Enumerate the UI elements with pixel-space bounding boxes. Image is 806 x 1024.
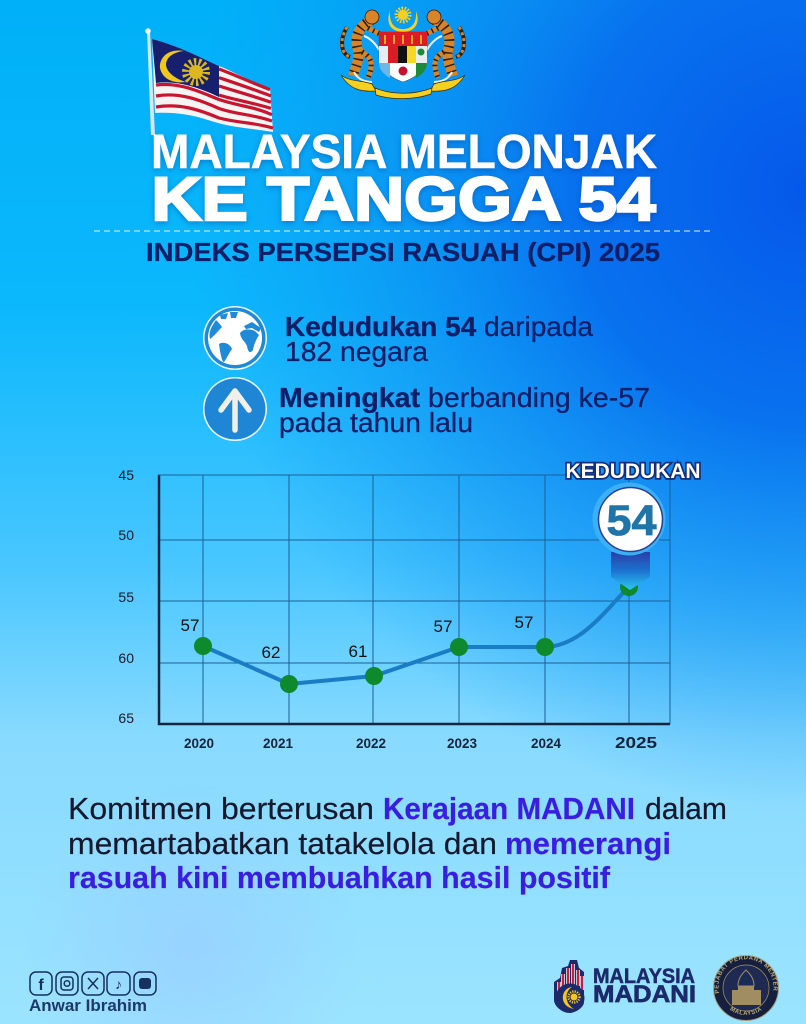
y axis labels — [118, 467, 134, 726]
closing statement: rasuah kini membuahkan hasil positif — [68, 860, 611, 895]
data labels: 62 — [262, 643, 280, 662]
title line 2: KE TANGGA 54 — [152, 165, 656, 233]
text: ranking: Kedudukan 54 daripada — [285, 311, 593, 342]
logo: Malaysia Madani — [554, 960, 696, 1013]
x axis labels — [184, 735, 657, 752]
chart grid — [158, 475, 670, 724]
x axis labels: 2025 — [615, 735, 657, 752]
icon: Malaysian flag — [145, 28, 273, 135]
closing statement: dalam — [645, 791, 727, 826]
social icons — [30, 972, 156, 995]
social icons: ♪ — [115, 976, 122, 992]
x axis labels: 2021 — [263, 736, 294, 751]
y axis labels: 55 — [118, 589, 134, 605]
logo: Pejabat Perdana Menteri seal: MALAYSIA — [730, 1006, 762, 1015]
data labels: 57 — [181, 616, 199, 635]
closing statement: Kerajaan MADANI — [383, 791, 635, 826]
data labels: 57 — [515, 613, 533, 632]
footer name: Anwar Ibrahim — [29, 996, 147, 1015]
closing statement: Komitmen berterusan — [68, 791, 374, 826]
left tiger — [342, 10, 380, 82]
social icons: f — [38, 977, 44, 994]
callout label: KEDUDUKAN — [566, 460, 700, 483]
text: improvement: pada tahun lalu — [279, 407, 473, 438]
data labels — [181, 613, 533, 662]
title line 1: MALAYSIA MELONJAK — [151, 126, 657, 179]
closing statement: memartabatkan tatakelola dan — [68, 826, 497, 861]
text: improvement — [279, 382, 650, 438]
icon: globe — [203, 306, 267, 370]
y axis labels: 50 — [118, 527, 134, 543]
callout: kedudukan 54 — [566, 460, 700, 590]
logo text: MALAYSIA — [593, 965, 695, 988]
y axis labels: 45 — [118, 467, 134, 483]
logo text — [593, 965, 696, 1008]
data line — [203, 587, 629, 684]
logo text: MADANI — [593, 981, 696, 1008]
line chart — [118, 467, 670, 752]
icon: up arrow — [203, 377, 267, 441]
y axis labels: 65 — [118, 710, 134, 726]
x axis labels: 2023 — [447, 736, 478, 751]
closing statement — [68, 791, 727, 895]
x axis labels: 2022 — [356, 736, 386, 751]
closing statement: memerangi — [505, 826, 671, 861]
data labels: 57 — [434, 617, 452, 636]
data points — [194, 578, 638, 693]
right tiger — [426, 10, 464, 82]
text: ranking — [285, 311, 593, 367]
title — [151, 126, 657, 233]
text: improvement: Meningkat berbanding ke-57 — [279, 382, 650, 413]
text: ranking: 182 negara — [285, 336, 428, 367]
data labels: 61 — [349, 642, 367, 661]
icon: national coat of arms — [341, 8, 465, 99]
logo mark — [554, 960, 584, 1013]
subtitle: INDEKS PERSEPSI RASUAH (CPI) 2025 — [146, 237, 660, 267]
callout number: 54 — [606, 497, 657, 545]
logo: Pejabat Perdana Menteri seal: PEJABAT PERDANA MENTERI — [714, 955, 778, 994]
x axis labels: 2024 — [531, 736, 562, 751]
y axis labels: 60 — [118, 650, 134, 666]
x axis labels: 2020 — [184, 736, 214, 751]
